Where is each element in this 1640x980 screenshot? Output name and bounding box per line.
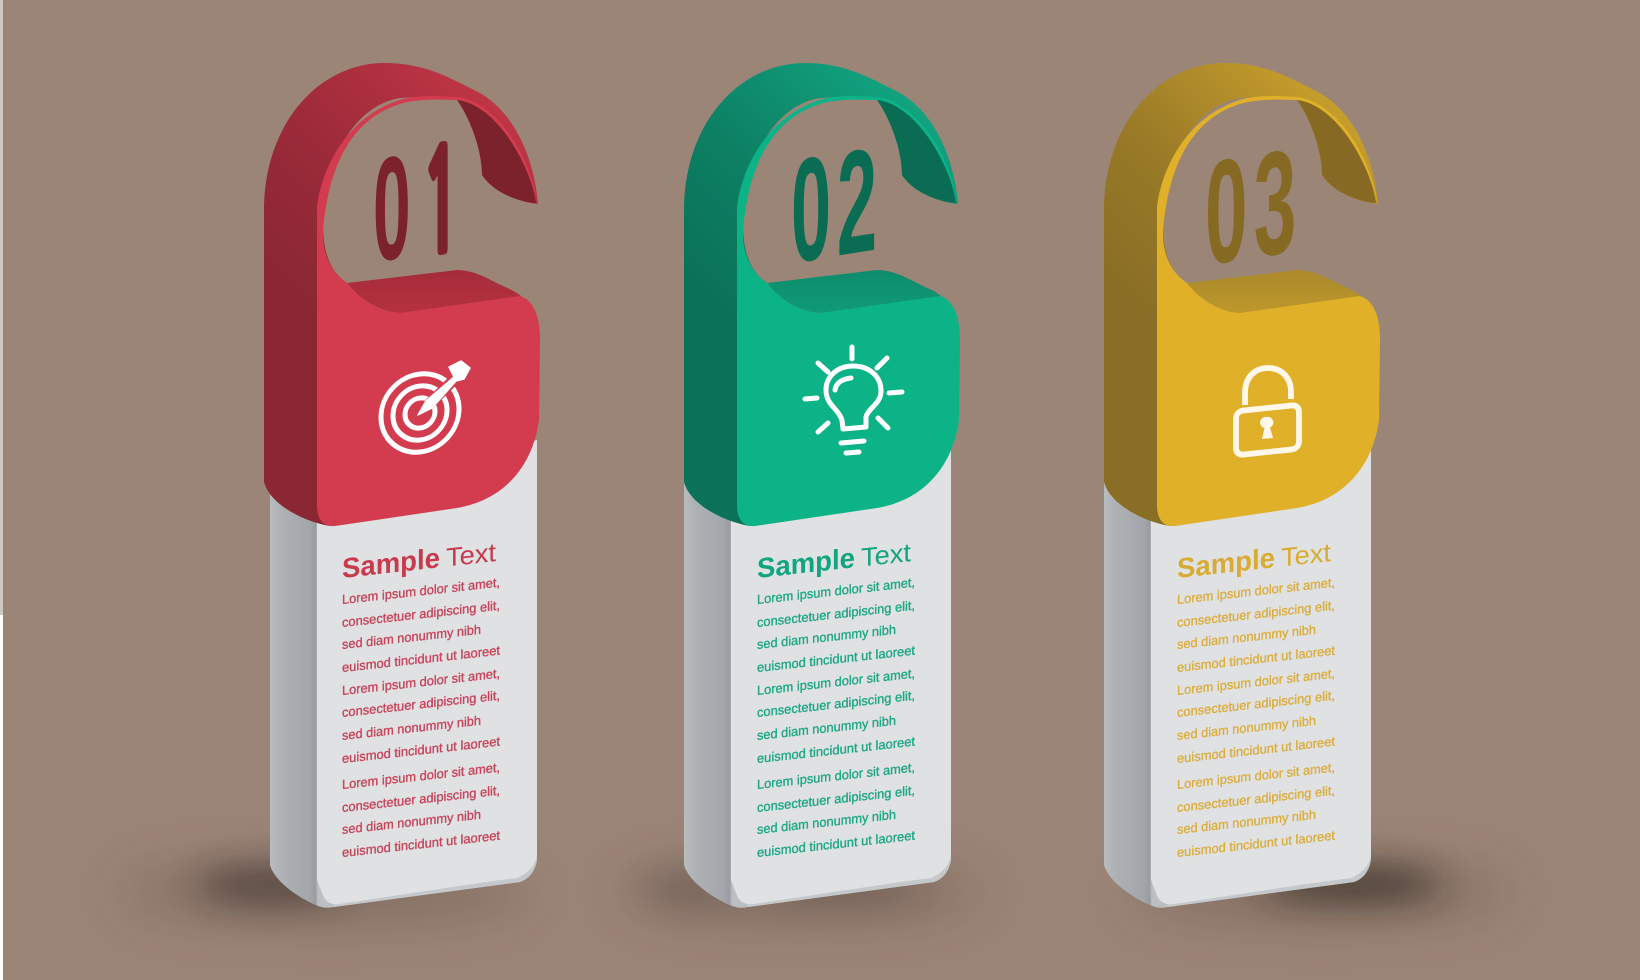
body lines 3: euismod tincidunt ut laoreet	[1177, 734, 1335, 766]
body lines 2: euismod tincidunt ut laoreet	[757, 734, 915, 766]
heading 3: Text	[1281, 537, 1332, 572]
body lines 3: euismod tincidunt ut laoreet	[1177, 828, 1335, 860]
front face	[317, 96, 540, 526]
body lines 2: Lorem ipsum dolor sit amet,	[757, 575, 915, 607]
body lines 1: euismod tincidunt ut laoreet	[342, 734, 500, 766]
card 2	[684, 440, 951, 908]
body lines 2: euismod tincidunt ut laoreet	[757, 828, 915, 860]
number 02: 02	[791, 115, 883, 295]
body lines 3: consectetuer adipiscing elit,	[1177, 598, 1335, 630]
hook inner surface	[1297, 100, 1376, 203]
body lines 2	[757, 575, 915, 860]
body lines 2: consectetuer adipiscing elit,	[757, 783, 915, 815]
heading 2	[757, 537, 912, 584]
heading 1	[342, 537, 497, 584]
icon: light bulb	[805, 347, 902, 453]
side and top surface	[264, 63, 538, 526]
body lines 1: consectetuer adipiscing elit,	[342, 598, 500, 630]
body lines 3: sed diam nonummy nibh	[1177, 713, 1316, 743]
body lines 1	[342, 575, 500, 860]
body lines 2: sed diam nonummy nibh	[757, 807, 896, 837]
side and top surface	[684, 63, 958, 526]
shadow 3	[1125, 864, 1515, 920]
number 03: 03	[1205, 117, 1303, 296]
ledge	[1187, 270, 1378, 320]
body lines 2: Lorem ipsum dolor sit amet,	[757, 666, 915, 698]
card 1	[270, 440, 537, 908]
body lines 1: sed diam nonummy nibh	[342, 807, 481, 837]
hanger 2	[684, 63, 960, 526]
text block 2	[757, 537, 915, 860]
number 01: 01	[373, 116, 461, 294]
ledge	[347, 270, 538, 320]
body lines 1: consectetuer adipiscing elit,	[342, 783, 500, 815]
body lines 3: sed diam nonummy nibh	[1177, 807, 1316, 837]
front face	[737, 96, 960, 526]
body lines 1: sed diam nonummy nibh	[342, 622, 481, 652]
body lines 2: euismod tincidunt ut laoreet	[757, 643, 915, 675]
side and top surface	[1104, 63, 1378, 526]
body lines 1: consectetuer adipiscing elit,	[342, 688, 500, 720]
front face	[1157, 96, 1380, 526]
panel 2: green hanger	[615, 63, 985, 918]
shadow 1	[115, 864, 535, 920]
body lines 2: consectetuer adipiscing elit,	[757, 688, 915, 720]
hanger 3	[1104, 63, 1380, 526]
card 3	[1104, 440, 1371, 908]
icon: target	[381, 361, 472, 456]
hook inner surface	[877, 100, 956, 203]
body lines 3: euismod tincidunt ut laoreet	[1177, 643, 1335, 675]
body lines 3: consectetuer adipiscing elit,	[1177, 783, 1335, 815]
text block 1	[342, 537, 500, 860]
body lines 3: consectetuer adipiscing elit,	[1177, 688, 1335, 720]
body lines 2: Lorem ipsum dolor sit amet,	[757, 760, 915, 792]
body lines 3: Lorem ipsum dolor sit amet,	[1177, 575, 1335, 607]
heading 1: Sample	[342, 542, 440, 584]
body lines 3	[1177, 575, 1335, 860]
heading 2: Sample	[757, 542, 855, 584]
body lines 2: sed diam nonummy nibh	[757, 713, 896, 743]
panel 3: yellow hanger	[1104, 63, 1515, 920]
hanger 1	[264, 63, 540, 526]
body lines 1: euismod tincidunt ut laoreet	[342, 643, 500, 675]
heading 1: Text	[446, 537, 497, 572]
body lines 1: Lorem ipsum dolor sit amet,	[342, 666, 500, 698]
body lines 3: Lorem ipsum dolor sit amet,	[1177, 760, 1335, 792]
left edge strip	[0, 0, 3, 980]
body lines 3: Lorem ipsum dolor sit amet,	[1177, 666, 1335, 698]
body lines 1: Lorem ipsum dolor sit amet,	[342, 575, 500, 607]
heading 3	[1177, 537, 1332, 584]
heading 2: Text	[861, 537, 912, 572]
ledge	[767, 270, 958, 320]
icon: padlock	[1236, 368, 1299, 455]
panel 1: red hanger	[115, 63, 540, 920]
body lines 2: sed diam nonummy nibh	[757, 622, 896, 652]
shadow 2	[615, 866, 985, 918]
body lines 2: consectetuer adipiscing elit,	[757, 598, 915, 630]
heading 3: Sample	[1177, 542, 1275, 584]
body lines 3: sed diam nonummy nibh	[1177, 622, 1316, 652]
body lines 1: Lorem ipsum dolor sit amet,	[342, 760, 500, 792]
body lines 1: sed diam nonummy nibh	[342, 713, 481, 743]
body lines 1: euismod tincidunt ut laoreet	[342, 828, 500, 860]
hook inner surface	[457, 100, 536, 203]
text block 3	[1177, 537, 1335, 860]
